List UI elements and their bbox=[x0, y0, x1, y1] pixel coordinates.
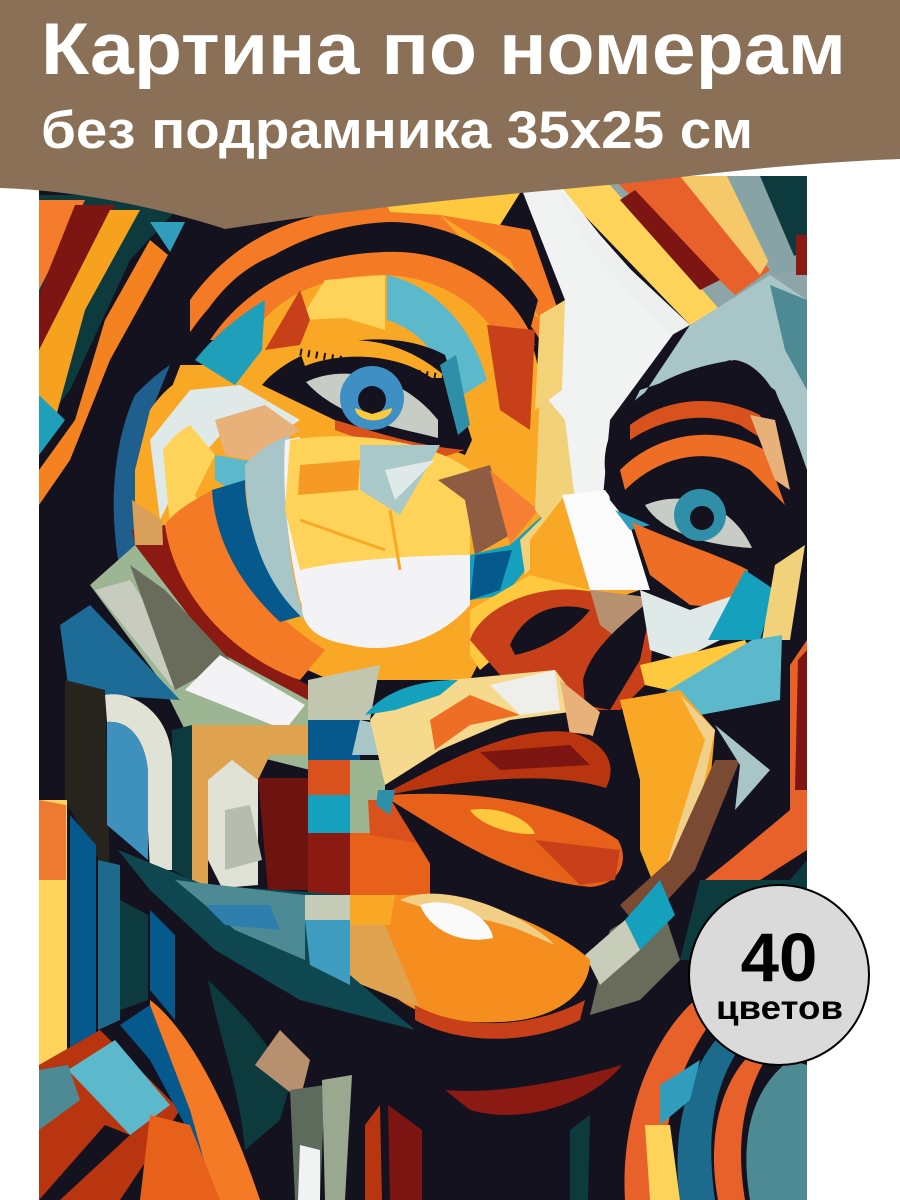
lower right arcs bbox=[624, 1000, 807, 1200]
lower left stripes bbox=[39, 800, 260, 1200]
lower middle shapes bbox=[208, 980, 622, 1200]
subtitle: без подрамника 35х25 см bbox=[41, 101, 753, 160]
left eye bbox=[262, 339, 472, 458]
brow orange inner bbox=[210, 252, 535, 345]
mid face yellow under nose bbox=[365, 670, 600, 785]
cheek left curves bbox=[114, 365, 325, 705]
center cheek yellow patches bbox=[470, 575, 590, 670]
header banner bbox=[0, 0, 900, 229]
lips bbox=[376, 731, 636, 915]
right temple blue-grey bbox=[620, 275, 807, 470]
right eye region bbox=[605, 360, 807, 880]
badge: 40 colours: 40 bbox=[741, 919, 817, 996]
painting: abstract cubist portrait bbox=[39, 176, 807, 1200]
nose bbox=[470, 589, 655, 710]
eye socket shapes bbox=[195, 275, 565, 430]
badge: 40 colours: цветов bbox=[716, 989, 843, 1026]
forehead orange band bbox=[190, 205, 565, 340]
hair: top left stripes bbox=[39, 195, 190, 505]
cheek right lower bbox=[585, 690, 807, 1015]
face left plane base bbox=[140, 248, 640, 680]
brow dark bbox=[172, 222, 538, 365]
hair: top right stripes bbox=[550, 176, 807, 330]
central yellow circle bbox=[285, 436, 570, 648]
forehead white plane bbox=[520, 185, 680, 590]
badge: 40 colours bbox=[689, 885, 869, 1065]
chin bbox=[350, 894, 590, 1039]
title: Картина по номерам bbox=[41, 9, 846, 90]
jaw left blocks bbox=[39, 545, 430, 897]
neck teal strip bbox=[118, 850, 415, 1030]
